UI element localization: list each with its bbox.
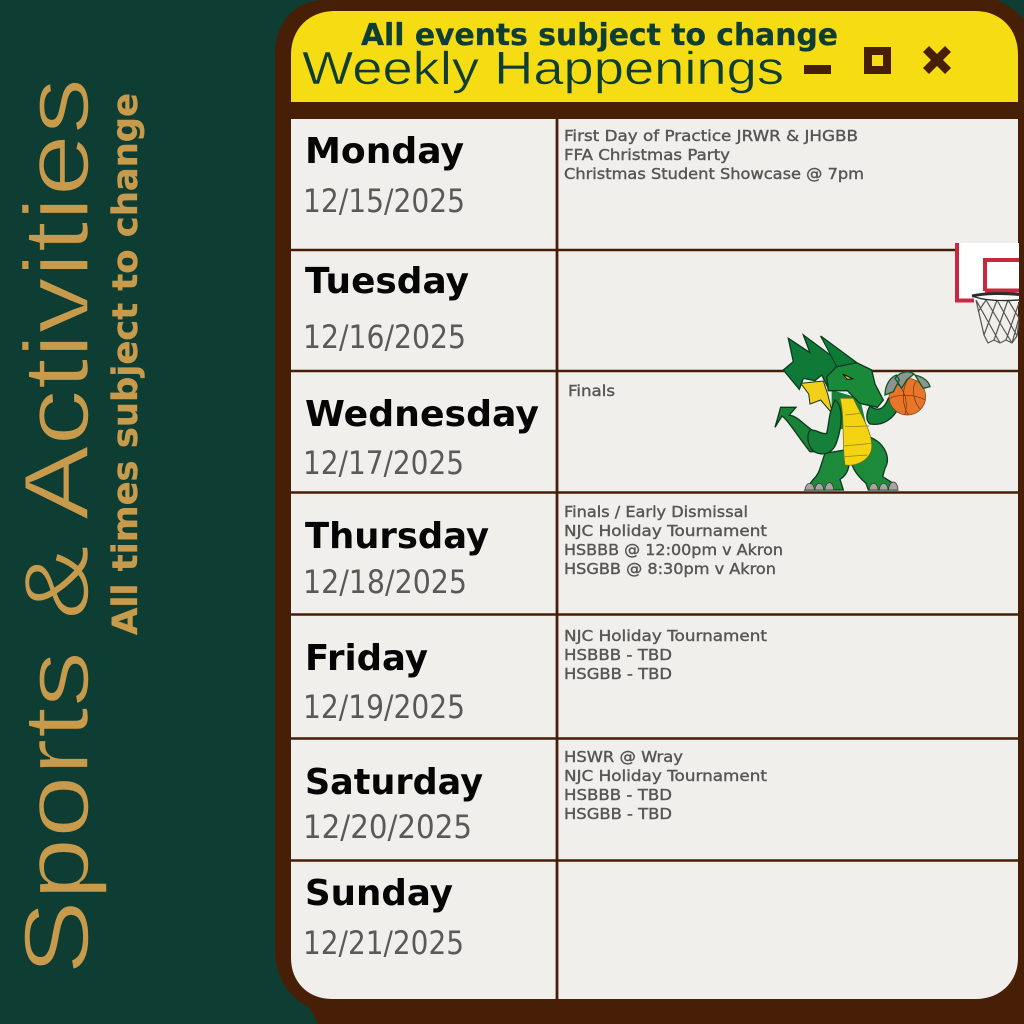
monday row: 12/15/2025 [303, 182, 465, 220]
icon: dragon mascot with basketball [775, 335, 930, 490]
hand claws [885, 372, 930, 395]
monday row [303, 127, 864, 220]
monday row: Christmas Student Showcase @ 7pm [564, 165, 864, 183]
saturday row: Saturday [305, 762, 483, 803]
monday row: FFA Christmas Party [564, 146, 730, 164]
saturday row: HSGBB - TBD [564, 805, 672, 823]
header title: Weekly Happenings [302, 42, 784, 94]
icon: minimize [804, 65, 831, 74]
right arm [867, 398, 897, 424]
tuesday row [303, 261, 469, 356]
left arm [808, 400, 841, 454]
head [827, 363, 883, 407]
sunday row: Sunday [305, 873, 453, 914]
wednesday row: 12/17/2025 [303, 444, 464, 482]
saturday row [303, 748, 767, 846]
wednesday row: Finals [568, 382, 615, 400]
tuesday row: Tuesday [305, 261, 469, 302]
yellow wing [801, 381, 833, 414]
monday row: First Day of Practice JRWR & JHGBB [564, 127, 858, 145]
friday row: 12/19/2025 [303, 688, 465, 726]
icon: maximize [864, 47, 891, 74]
icon: close [923, 46, 951, 74]
friday row: HSBBB - TBD [564, 646, 672, 664]
monday row: Monday [305, 131, 464, 172]
thursday row: HSGBB @ 8:30pm v Akron [564, 560, 776, 578]
window frame [275, 0, 1024, 1024]
icon: basketball hoop [955, 243, 1019, 343]
wednesday row [303, 382, 615, 482]
friday row: NJC Holiday Tournament [564, 627, 767, 645]
saturday row: HSBBB - TBD [564, 786, 672, 804]
right thigh and foot [852, 437, 897, 490]
eye [843, 374, 853, 379]
thursday row: NJC Holiday Tournament [564, 522, 767, 540]
sunday row [303, 873, 464, 962]
sidebar title: Sports & Activities [6, 78, 108, 975]
sunday row: 12/21/2025 [303, 924, 464, 962]
thursday row: 12/18/2025 [303, 563, 467, 601]
thursday row [303, 503, 783, 601]
wing [783, 335, 857, 389]
belly [840, 398, 872, 465]
tail [775, 407, 823, 452]
friday row: Friday [305, 638, 428, 679]
horn [821, 336, 857, 367]
sidebar subtitle: All times subject to change [106, 93, 146, 635]
wednesday row: Wednesday [305, 394, 539, 435]
claws [805, 482, 898, 490]
friday row [303, 627, 767, 726]
saturday row: NJC Holiday Tournament [564, 767, 767, 785]
tuesday row: 12/16/2025 [303, 318, 466, 356]
thursday row: Thursday [305, 516, 489, 557]
header notice: All events subject to change [361, 18, 838, 53]
left thigh and foot [805, 450, 849, 490]
saturday row: 12/20/2025 [303, 808, 472, 846]
thursday row: HSBBB @ 12:00pm v Akron [564, 541, 783, 559]
friday row: HSGBB - TBD [564, 665, 672, 683]
saturday row: HSWR @ Wray [564, 748, 683, 766]
schedule panel [291, 119, 1018, 999]
thursday row: Finals / Early Dismissal [564, 503, 748, 521]
basketball [889, 378, 926, 415]
header bar [291, 11, 1018, 102]
neck [832, 390, 867, 430]
